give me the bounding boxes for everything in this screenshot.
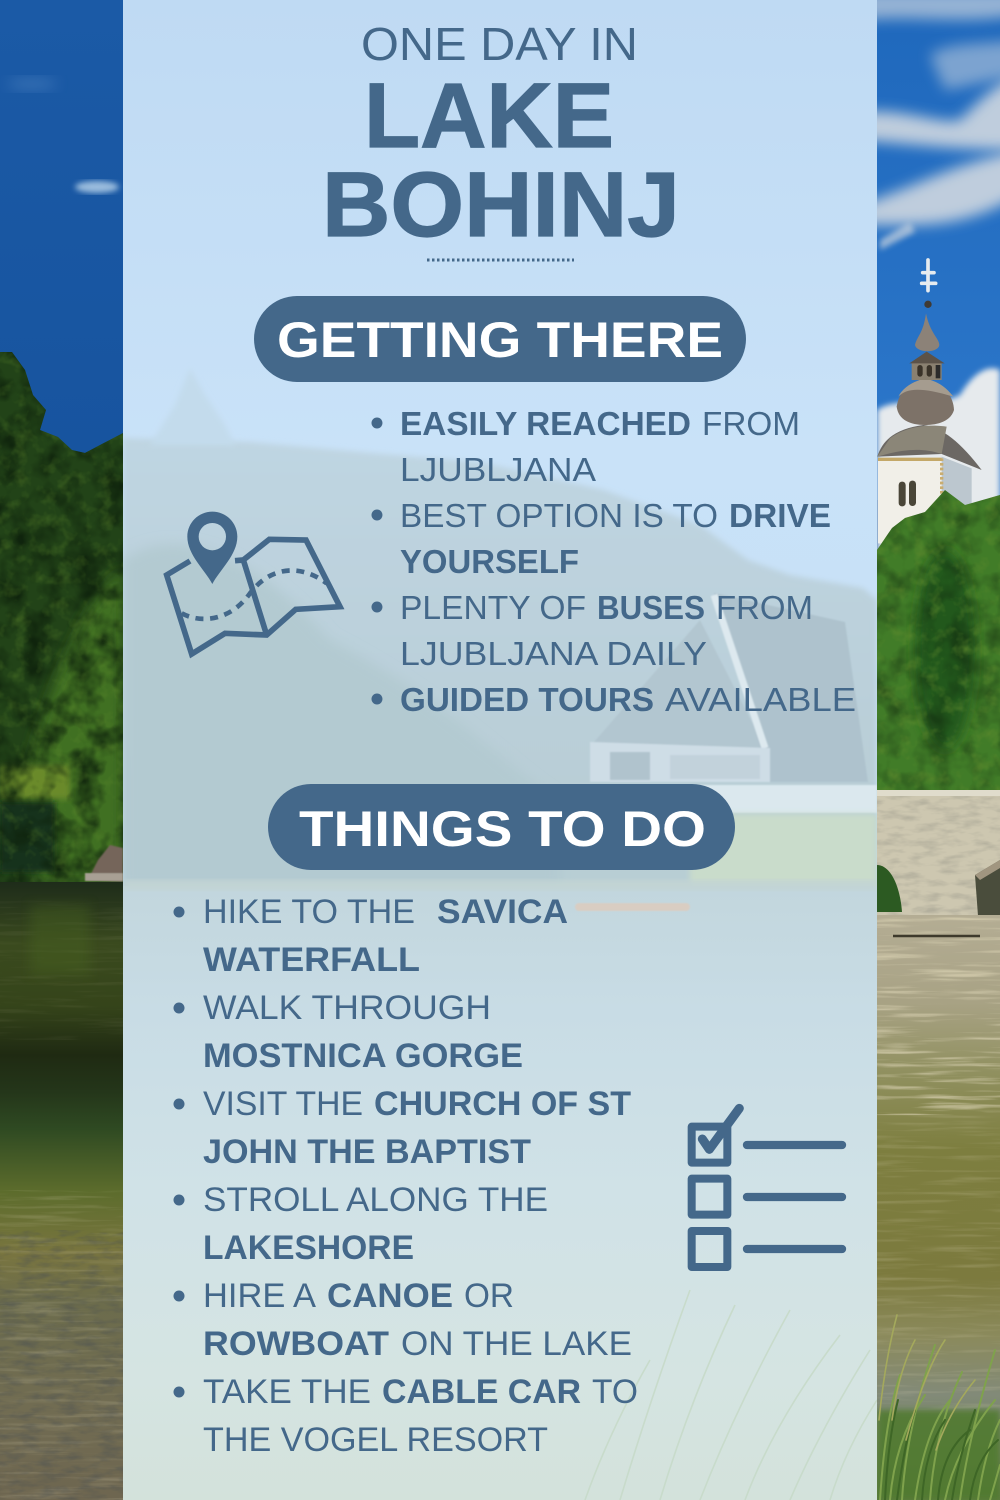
heading pill: things to do (268, 784, 735, 870)
list: getting there: YOURSELF (400, 543, 579, 580)
left lake water (0, 882, 123, 1500)
title: ONE DAY IN (361, 18, 638, 70)
left forest (0, 352, 123, 882)
list: things to do: TAKE THE (203, 1373, 371, 1411)
list: getting there: EASILY REACHED (400, 405, 691, 442)
list: things to do: ROWBOAT (203, 1325, 389, 1363)
list: getting there: PLENTY OF (400, 589, 586, 626)
ghost church (590, 594, 877, 813)
list: things to do: CABLE CAR (382, 1373, 581, 1411)
title: LAKE (364, 65, 614, 167)
list: things to do: HIRE A (203, 1277, 316, 1315)
list: getting there: AVAILABLE (665, 681, 856, 718)
list: things to do: TO (592, 1373, 638, 1411)
list: things to do: LAKESHORE (203, 1229, 414, 1267)
heading pill: getting there (254, 296, 746, 382)
heading pill: things to do: THINGS TO DO (299, 801, 706, 857)
list: things to do: CANOE (327, 1277, 453, 1315)
list: things to do (174, 893, 638, 1459)
list: getting there: DRIVE (729, 497, 831, 534)
heading pill: getting there: GETTING THERE (277, 312, 723, 368)
translucent text panel (123, 0, 877, 1500)
list: things to do: CHURCH OF ST (374, 1085, 631, 1123)
icon: checklist (692, 1108, 842, 1267)
list: getting there: FROM (702, 405, 800, 442)
foreground grass (877, 1315, 1000, 1500)
list: getting there (372, 405, 856, 718)
list: things to do: JOHN THE BAPTIST (203, 1133, 531, 1171)
icon: map with location pin (167, 512, 340, 654)
list: getting there: BUSES (597, 589, 705, 626)
list: things to do: VISIT THE (203, 1085, 363, 1123)
ghost lake (123, 886, 877, 1500)
list: things to do: ON THE LAKE (401, 1325, 632, 1363)
list: getting there: FROM (716, 589, 813, 626)
list: things to do: OR (464, 1277, 514, 1315)
list: things to do: WATERFALL (203, 941, 420, 979)
list: things to do: WALK THROUGH (203, 989, 491, 1027)
list: things to do: MOSTNICA GORGE (203, 1037, 523, 1075)
right trees (877, 490, 1000, 792)
list: getting there: LJUBLJANA DAILY (400, 635, 707, 672)
title: BOHINJ (322, 154, 680, 256)
list: things to do: HIKE TO THE (203, 893, 415, 931)
church tower (877, 260, 982, 543)
list: things to do: SAVICA (437, 893, 568, 931)
right lake water (877, 915, 1000, 1500)
list: things to do: STROLL ALONG THE (203, 1181, 548, 1219)
list: things to do: THE VOGEL RESORT (203, 1421, 548, 1459)
list: getting there: GUIDED TOURS (400, 681, 654, 718)
title (322, 18, 680, 256)
sky clouds (877, 0, 1000, 252)
list: getting there: LJUBLJANA (400, 451, 596, 488)
stone wall and boathouse (877, 790, 1000, 916)
list: getting there: BEST OPTION IS TO (400, 497, 718, 534)
